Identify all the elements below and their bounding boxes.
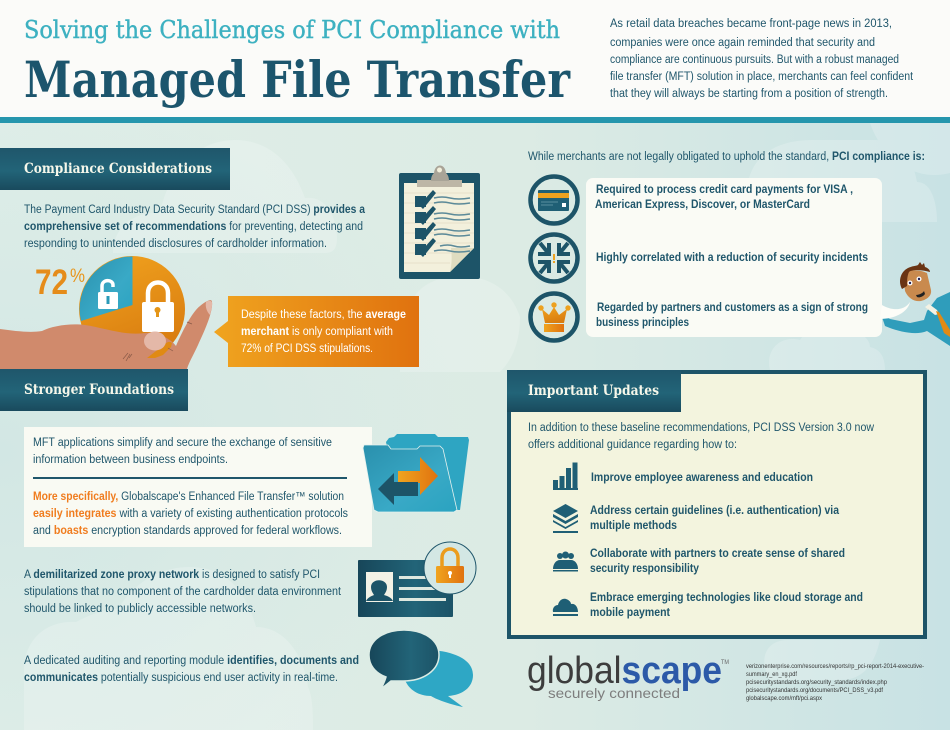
icon: ID card with lock [358,542,476,617]
intro paragraph [610,18,914,100]
section: Stronger Foundations heading [0,369,188,411]
stat: 72 percent: 72 [35,263,68,302]
demilitarized zone text: should be linked to publicly accessible networks. [24,603,256,615]
demilitarized zone text: A demilitarized zone proxy network is designed to satisfy PCI [24,569,320,581]
clipboard clip [417,166,462,187]
Important Updates heading [507,370,681,412]
source references [746,664,924,702]
section: Compliance Considerations heading: Compliance Considerations [24,161,212,177]
compliance paragraph: responding to unintended disclosures of cardholder information. [24,238,327,250]
callout: average merchant: Despite these factors, the average [241,309,406,321]
panel: PCI compliance benefits [586,178,882,337]
icon: clipboard checklist [399,166,480,279]
auditing text [24,655,359,684]
section: Compliance Considerations heading [0,148,230,190]
panel: MFT applications: information between business endpoints. [33,454,228,466]
panel: MFT applications: MFT applications simplify and secure the exchange of sensitive [33,437,332,449]
intro paragraph: As retail data breaches became front-page news in 2013, [610,18,892,30]
panel: PCI compliance benefits: American Express, Discover, or MasterCard [595,199,810,211]
icon: speech bubbles [369,630,473,707]
logo: globalscape: TM [721,660,729,666]
item: collaborate: Collaborate with partners to create sense of shared [590,548,845,560]
panel: Important Updates [507,370,925,637]
intro paragraph: companies were once again reminded that security and [610,37,875,49]
panel: PCI compliance benefits: business principles [596,317,689,329]
item: employee awareness [553,462,813,490]
item: guidelines [553,504,840,533]
source references: summary_en_xg.pdf [746,672,797,678]
lock badge [424,542,476,594]
item: collaborate: security responsibility [590,563,700,575]
hand holding pie [0,300,212,369]
panel: MFT applications: More specifically, Globalscape's Enhanced File Transfer™ solution [33,491,344,503]
source references: globalscape.com/mft/pci.aspx [746,696,822,702]
source references: verizonenterprise.com/resources/reports/rp_pci-report-2014-executive- [746,664,924,670]
icon: crown [530,294,578,340]
icon: open lock [98,281,118,309]
stat: 72 percent: % [70,266,85,287]
section: Stronger Foundations heading: Stronger Foundations [24,382,174,398]
panel: PCI compliance benefits: Regarded by partners and customers as a sign of strong [597,302,868,314]
auditing text: A dedicated auditing and reporting module identifies, documents and [24,655,359,667]
item: employee awareness: Improve employee awareness and education [591,472,813,484]
icon: closed lock [142,282,174,332]
item: cloud technologies [553,592,863,619]
panel: PCI compliance benefits: Required to process credit card payments for VISA , [596,184,853,196]
title: main line: Managed File Transfer [24,50,571,109]
demilitarized zone text: stipulations that no component of the cardholder data environment [24,586,342,598]
item: guidelines: Address certain guidelines (i.e. authentication) via [590,505,840,517]
compliance paragraph: The Payment Card Industry Data Security Standard (PCI DSS) provides a [24,204,366,216]
compliance paragraph: comprehensive set of recommendations for preventing, detecting and [24,221,363,233]
Important Updates heading: Important Updates [528,383,659,399]
source references: pcisecuritystandards.org/documents/PCI_DSS_v3.pdf [746,688,883,694]
item: collaborate [553,548,845,575]
panel: MFT applications: easily integrates with a variety of existing authentication protocols [33,508,348,520]
character: businessman [880,262,950,346]
logo: globalscape: globalscape [527,650,722,692]
updates intro: offers additional guidance regarding how to: [528,439,737,451]
updates intro: In addition to these baseline recommendations, PCI DSS Version 3.0 now [528,422,875,434]
callout: average merchant [214,296,419,367]
panel: PCI compliance benefits: Highly correlated with a reduction of security incidents [596,252,868,264]
source references: pcisecuritystandards.org/security_standards/index.php [746,680,888,686]
updates intro [528,422,875,451]
title: subtitle line: Solving the Challenges of PCI Compliance with [24,16,560,44]
intro paragraph: file transfer (MFT) solution in place, merchants can feel confident [610,71,914,83]
auditing text: communicates potentially suspicious end user activity in real-time. [24,672,338,684]
item: cloud technologies: Embrace emerging technologies like cloud storage and [590,592,863,604]
intro paragraph: compliance are continuous pursuits. But with a robust managed [610,54,899,66]
callout: average merchant: merchant is only compliant with [241,326,393,338]
icon: converging arrows [530,234,578,282]
item: guidelines: multiple methods [590,520,677,532]
item: cloud technologies: mobile payment [590,607,670,619]
panel: MFT applications: and boasts encryption standards approved for federal workflows. [33,525,342,537]
icon: credit card [530,176,578,224]
logo: globalscape: securely connected [548,685,680,701]
icon: folder with transfer arrows [363,434,469,512]
compliance lead-in: While merchants are not legally obligated to uphold the standard, PCI compliance is: [528,151,925,163]
checklist rows [415,190,436,257]
callout: average merchant: 72% of PCI DSS stipulations. [241,343,373,355]
header band [0,0,950,123]
compliance paragraph [24,204,366,250]
panel: MFT applications [24,427,372,547]
pie chart with locks [79,256,185,362]
demilitarized zone text [24,569,342,615]
intro paragraph: that they will always be starting from a position of strength. [610,88,888,100]
